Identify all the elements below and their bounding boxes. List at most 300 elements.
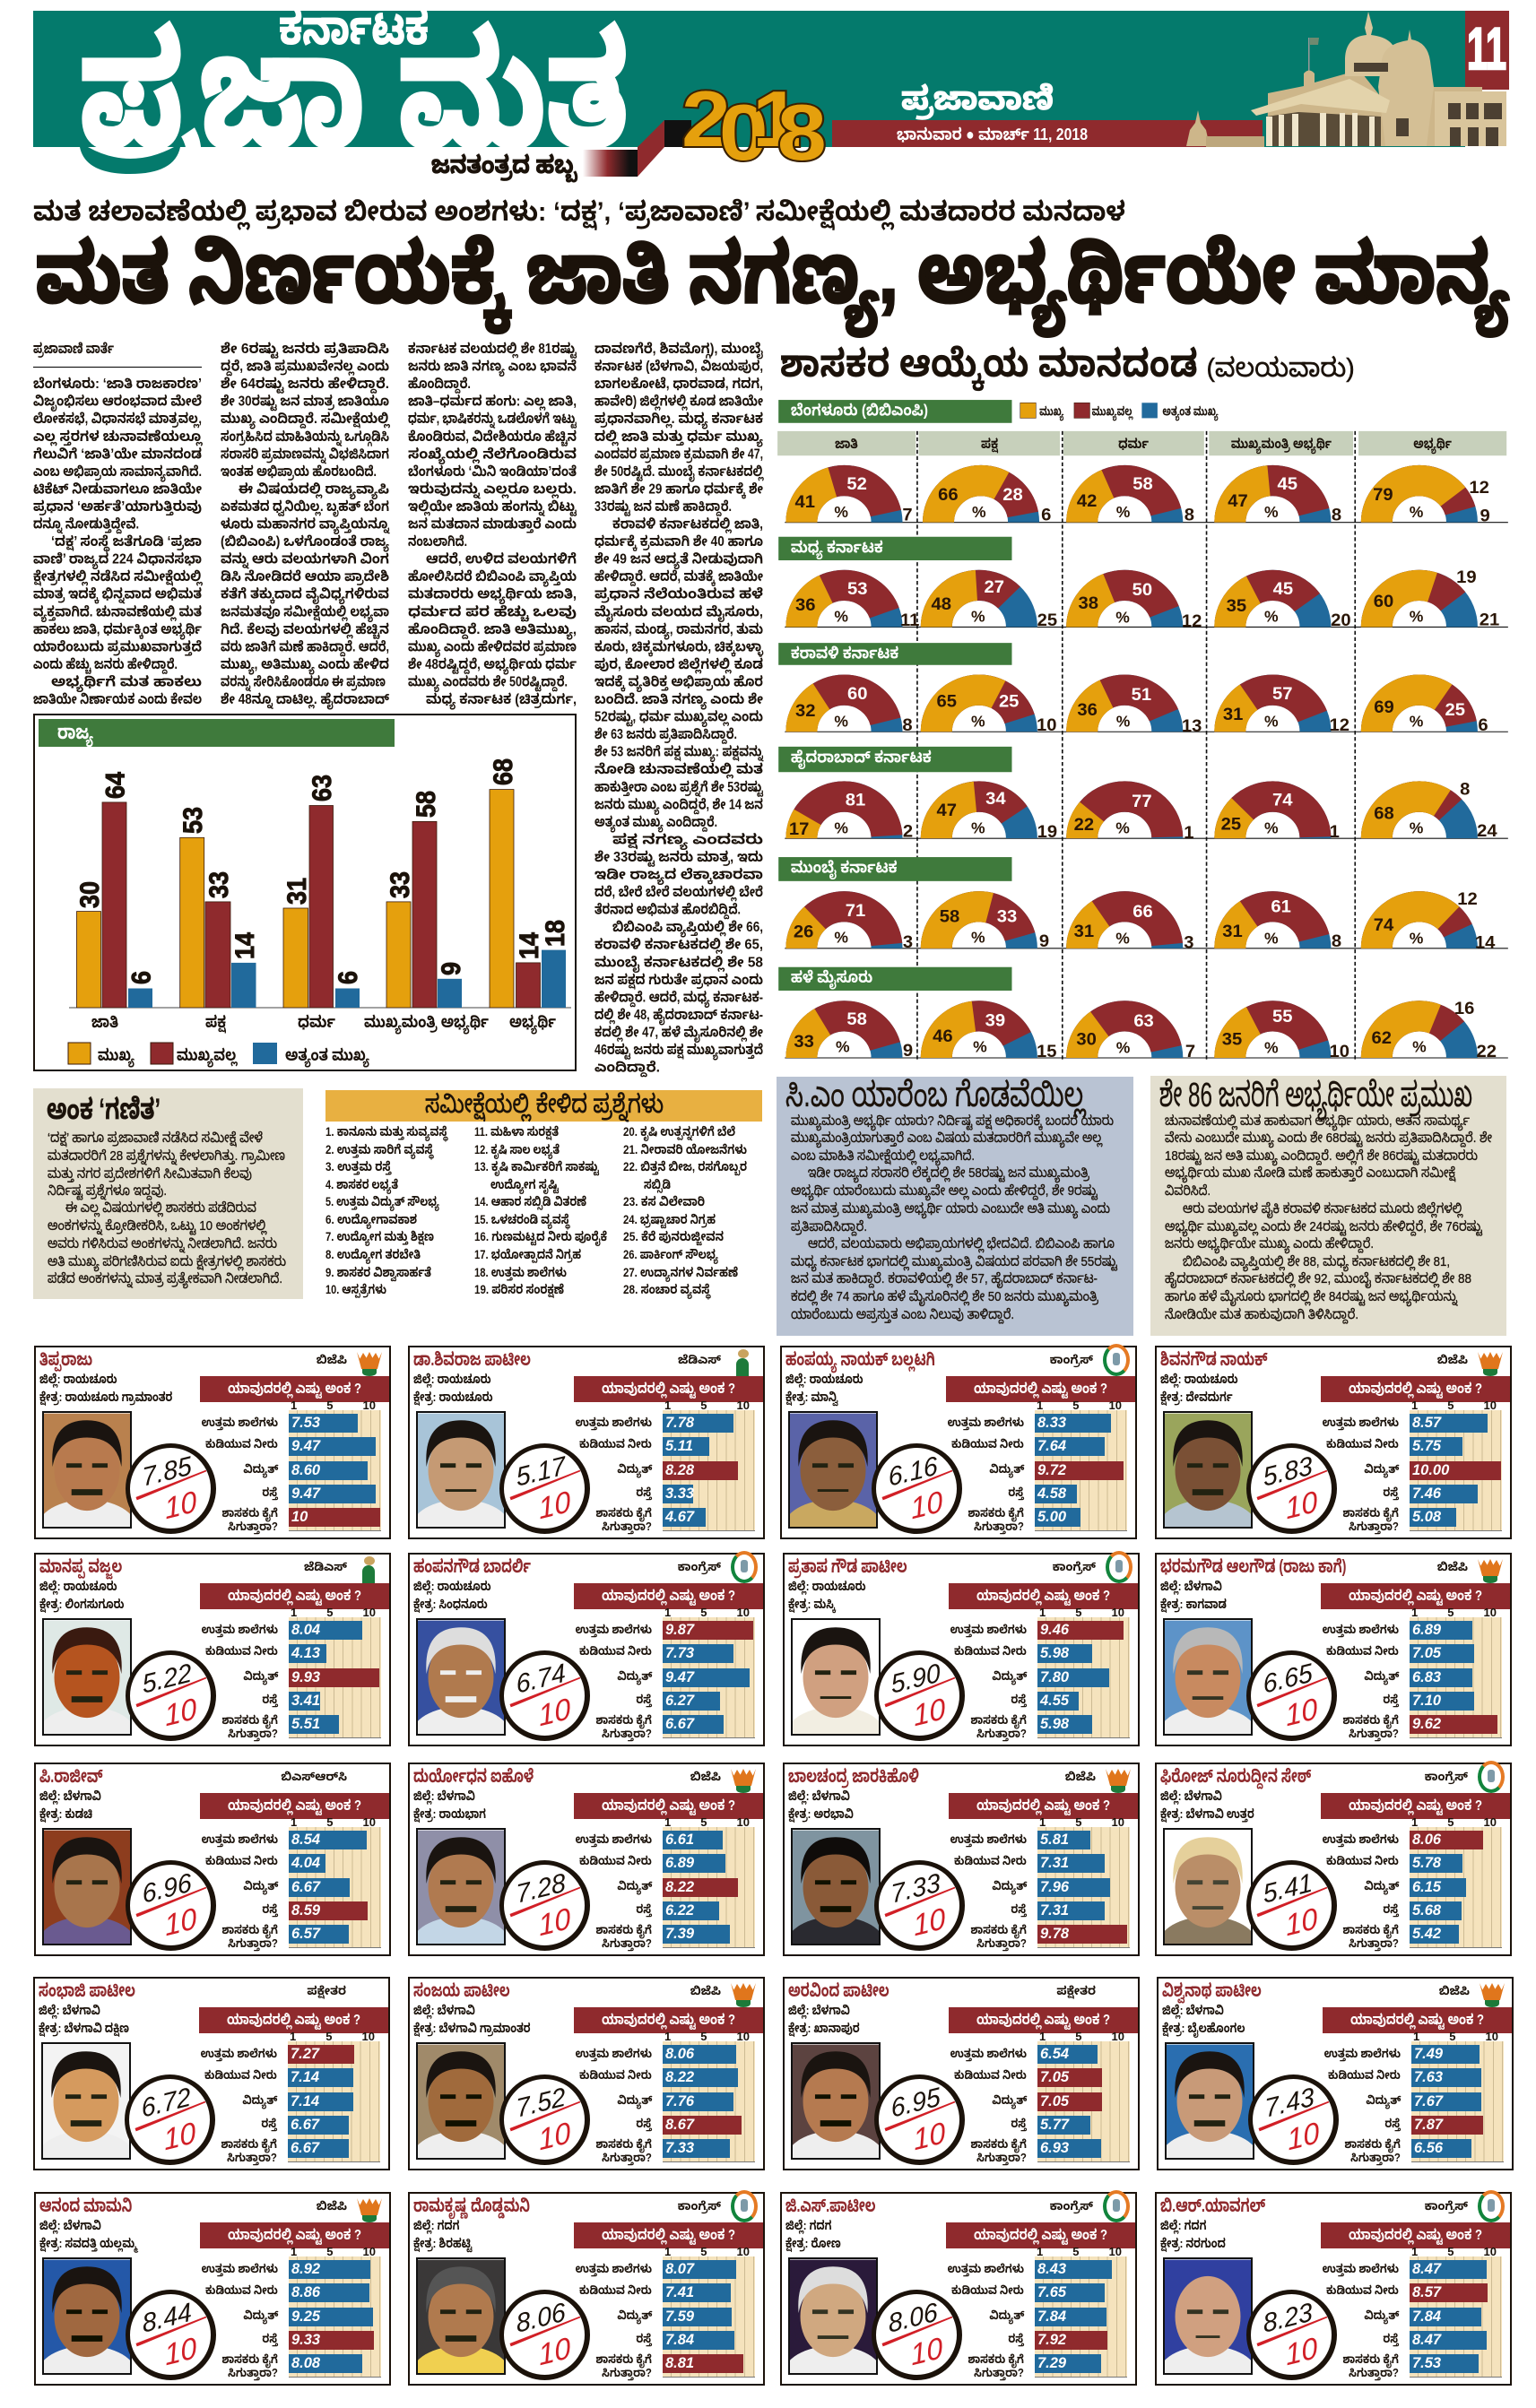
scores chart: ಉತ್ತಮ ಶಾಲೆಗಳು [1324,2047,1401,2060]
article column 3: ಜನರು ಜಾತಿ ನಗಣ್ಯ ಎಂಬ ಭಾವನೆ [408,359,577,377]
gauges: hyderabad karnataka: 77 [1132,792,1152,811]
gauges: old mysuru: % [1116,1039,1130,1057]
gauges: mumbai karnataka: 74 [1374,915,1394,935]
gauges: central karnataka: 48 [931,594,951,614]
scores chart: ರಸ್ತೆ [263,1486,278,1499]
bars: cm candidate [386,821,462,1008]
gauges: old mysuru: % [1412,1038,1427,1056]
scores chart: ಕುಡಿಯುವ ನೀರು [1326,1437,1399,1451]
section title suffix: (ವಲಯವಾರು) [1207,354,1355,383]
candidate card 5 [34,1553,391,1746]
scores chart: ರಸ್ತೆ [1385,2117,1401,2130]
scores chart: 7.27 [291,2046,319,2062]
gauges: hyderabad karnataka: 17 [789,819,809,839]
article column 1: ಯಾರೆಂಬುದು ಪ್ರಮುಖವಾಗುತ್ತದೆ [33,639,202,656]
article column 3: ಮುಖ್ಯ ಎಂದು ಹೇಳಿದವರ ಪ್ರಮಾಣ [408,639,577,657]
bar value labels: 33 [386,871,415,898]
gauges: old mysuru: 22 [1477,1042,1497,1061]
gauges: coastal karnataka: % [1264,713,1279,730]
article column 4: ಬಿಬಿಎಂಪಿ ವ್ಯಾಪ್ತಿಯಲ್ಲಿ ಶೇ 66, [612,920,763,938]
gauges: central karnataka: 21 [1480,610,1499,629]
panel: chief minister candidate: ಎಂಬ ಮಾಹಿತಿ ಸಮೀಕ್ಷೆಯಲ್ಲಿ ಲಭ್ಯವಾಗಿದೆ. [791,1148,975,1166]
article column 3: ಬೆಂಗಳೂರು ‘ಮಿನಿ ಇಂಡಿಯಾ’ದಂತೆ [408,464,577,480]
party: ಕಾಂಗ್ರೆಸ್ [1053,1560,1096,1573]
scores chart: 5 [700,1606,707,1619]
gauges: old mysuru: % [973,1038,987,1056]
scores chart: 10 [1112,1606,1124,1619]
party: ಬಿಜೆಪಿ [1437,1560,1468,1573]
category labels: ಪಕ್ಷ [205,1013,226,1034]
gauges: bengaluru: 42 [1077,491,1097,511]
article column 1: ಕ್ಷೇತ್ರಗಳಲ್ಲಿ ನಡೆಸಿದ ಸಮೀಕ್ಷೆಯಲ್ಲಿ [33,569,203,586]
name [1162,1981,1323,2037]
article column 1: ಎಂದು ಹೆಚ್ಚು ಜನರು ಹೇಳಿದ್ದಾರೆ. [33,657,178,674]
name: ಕ್ಷೇತ್ರ: ಖಾನಾಪುರ [788,2021,860,2035]
scores chart: ರಸ್ತೆ [637,1902,652,1916]
article column 1: ವಿಜೃಂಭಿಸಲು ಆರಂಭವಾದ ಮೇಲೆ [33,394,202,412]
name: ಕ್ಷೇತ್ರ: ರಾಯಚೂರು [413,1390,493,1404]
scores chart: 10 [1486,2030,1498,2043]
gauges: coastal karnataka: % [1116,713,1130,730]
name: ಜಿಲ್ಲೆ: ಗದಗ [413,2218,459,2232]
scores chart [203,2246,387,2380]
gauges: mumbai karnataka: % [834,929,848,946]
candidate card 16 [1157,1977,1514,2170]
scores chart: 7.14 [291,2069,319,2085]
gauges: coastal karnataka [795,684,1488,774]
icon: jds [357,1558,382,1583]
scores chart: ಸಿಗುತ್ತಾರಾ? [1349,1727,1399,1740]
scores chart: 7.67 [1414,2093,1443,2109]
gauges: coastal karnataka: 10 [1037,715,1057,735]
gauges: hyderabad karnataka: 22 [1074,815,1094,835]
heading [1321,2222,1510,2248]
article column 2: ಮುಖ್ಯ, ಅತಿಮುಖ್ಯ ಎಂದು ಹೇಳಿದ [221,657,389,675]
name: ಕ್ಷೇತ್ರ: ಲಿಂಗಸುಗೂರು [39,1597,124,1611]
bar value labels: 53 [178,807,208,834]
chart legend: ಅತ್ಯಂತ ಮುಖ್ಯ [285,1046,369,1068]
scores chart: 7.10 [1412,1693,1441,1709]
name: ಪ್ರತಾಪ ಗೌಡ ಪಾಟೀಲ [788,1557,907,1577]
score: 8.06 [887,2298,939,2339]
scores chart: 1 [1039,1815,1046,1829]
article column 1: ಗೆಲುವಿಗೆ ‘ಜಾತಿ’ಯೇ ಮಾನದಂಡ [33,446,202,462]
gauges: bengaluru: 7 [902,506,913,524]
scores chart: ಕುಡಿಯುವ ನೀರು [205,2283,278,2297]
question list 1-10 [325,1124,448,1298]
party: ಪಕ್ಷೇತರ [307,1984,346,1997]
bar value labels: 6 [127,971,156,984]
scores chart: 9.93 [291,1669,320,1685]
scores chart: ವಿದ್ಯುತ್ [243,1879,278,1893]
scores chart: 9.46 [1040,1622,1069,1638]
gauges: mumbai karnataka: % [1115,930,1130,947]
scores chart: ಉತ್ತಮ ಶಾಲೆಗಳು [576,2047,652,2060]
bar value labels: 14 [515,932,544,959]
article column 1: ಪ್ರಧಾನ ‘ಅರ್ಹತೆ’ಯಾಗುತ್ತಿರುವು [33,499,202,516]
scores chart: ಸಿಗುತ್ತಾರಾ? [602,1936,652,1950]
chart legend: ಮುಖ್ಯ [98,1046,135,1068]
scores chart: 7.14 [291,2093,319,2109]
scores chart [576,1399,755,1535]
icon: jds [731,1351,756,1376]
scores chart: ಕುಡಿಯುವ ನೀರು [951,1437,1024,1451]
scores chart [1323,1816,1508,1951]
scores chart: ಸಿಗುತ್ತಾರಾ? [1349,2366,1399,2379]
scores chart: ಸಿಗುತ್ತಾರಾ? [228,1936,278,1950]
region labels: ಮಧ್ಯ ಕರ್ನಾಟಕ [791,539,883,559]
bars: caste [77,802,152,1008]
heading [574,2222,763,2248]
name: ಸಂಜಯ ಪಾಟೀಲ [413,1981,510,2001]
name: ರಾಮಕೃಷ್ಣ ದೊಡ್ಡಮನಿ [413,2196,530,2216]
article column 3: ಕರ್ನಾಟಕ ವಲಯದಲ್ಲಿ ಶೇ 81ರಷ್ಟು [408,342,577,359]
scores chart: ಕುಡಿಯುವ ನೀರು [205,1854,278,1867]
article column 4 [594,342,764,1078]
score: 7.43 [1263,2083,1315,2124]
scores chart: 10.00 [1412,1462,1449,1478]
article column 3: ಆದರೆ, ಉಳಿದ ವಲಯಗಳಿಗೆ [426,552,577,567]
score: 6.95 [889,2083,942,2124]
name: ಕ್ಷೇತ್ರ: ನರಗುಂದ [1160,2236,1226,2250]
score [126,1860,216,1951]
scores chart: ವಿದ್ಯುತ್ [243,1669,278,1683]
heading: ಯಾವುದರಲ್ಲಿ ಎಷ್ಟು ಅಂಕ ? [602,1382,735,1397]
scores chart: ವಿದ್ಯುತ್ [617,1879,652,1893]
scores chart: ಶಾಸಕರು ಕೈಗೆ [968,2352,1024,2366]
score: 10 [1284,1901,1319,1943]
scores chart: ಸಿಗುತ್ತಾರಾ? [602,1520,652,1533]
score [126,1650,216,1741]
score: 10 [1284,1484,1319,1526]
heading [574,1793,763,1819]
bar value labels: 9 [437,962,466,975]
scores chart: ಕುಡಿಯುವ ನೀರು [579,1854,652,1867]
name [785,2196,947,2252]
scores chart: ಉತ್ತಮ ಶಾಲೆಗಳು [202,1623,278,1636]
scores chart: 5 [1447,2245,1454,2258]
name: ಕ್ಷೇತ್ರ: ಕುಡಚಿ [39,1806,92,1821]
scores chart: 5 [326,1815,334,1829]
scores chart: ರಸ್ತೆ [262,2117,277,2130]
scores chart: ಶಾಸಕರು ಕೈಗೆ [596,1506,652,1520]
gauges: central karnataka: % [834,608,848,626]
heading [1321,1376,1510,1402]
masthead banner [33,3,1509,201]
gauges: bengaluru: 58 [1132,474,1153,494]
scores chart: 10 [1484,1399,1497,1412]
article column 1: ಹಾಕಲು ಜಾತಿ, ಧರ್ಮಕ್ಕಿಂತ ಅಭ್ಯರ್ಥಿ [33,622,202,640]
scores chart: 1 [1037,1399,1043,1412]
gauges: mumbai karnataka: 61 [1271,897,1291,917]
gauges: old mysuru: % [1264,1039,1279,1057]
scores chart: 6.83 [1412,1669,1441,1685]
gauges: coastal karnataka: % [1410,713,1423,730]
scores chart: 6.61 [665,1832,694,1848]
bars: religion [283,805,360,1008]
name: ವಿಶ್ವನಾಥ ಪಾಟೀಲ [1162,1981,1262,2001]
gauges: bengaluru: 28 [1002,485,1023,505]
gauges: central karnataka: 38 [1079,593,1098,613]
heading [200,1793,389,1819]
scores chart: 10 [1484,1815,1497,1829]
score [1246,1860,1337,1951]
article column 2: ಸಂಗ್ರಹಿಸಿದ ಮಾಹಿತಿಯನ್ನು ಒಗ್ಗೂಡಿಸಿ [221,429,389,446]
scores chart: ಉತ್ತಮ ಶಾಲೆಗಳು [1323,1416,1399,1429]
date: ಭಾನುವಾರ ● ಮಾರ್ಚ್ 11, 2018 [897,126,1088,143]
article column 2: ಜನಮತವೂ ಸಮೀಕ್ಷೆಯಲ್ಲಿ ಲಭ್ಯವಾ [221,604,389,622]
gauges: hyderabad karnataka: % [834,819,848,836]
name: ಕ್ಷೇತ್ರ: ಅರಭಾವಿ [788,1806,854,1821]
question list 11-19: 19. ಪರಿಸರ ಸಂರಕ್ಷಣೆ [474,1282,564,1299]
score: 7.85 [141,1451,193,1493]
gauge legend: ಅತ್ಯಂತ ಮುಖ್ಯ [1162,404,1219,421]
name: ಆನಂದ ಮಾಮನಿ [39,2196,132,2216]
scores chart: ಸಿಗುತ್ತಾರಾ? [602,1727,652,1740]
heading: ಯಾವುದರಲ್ಲಿ ಎಷ್ಟು ಅಂಕ ? [976,1798,1110,1814]
scores chart: 1 [1411,1399,1418,1412]
candidate card 12 [1155,1763,1512,1956]
scores chart: ಸಿಗುತ್ತಾರಾ? [974,2366,1024,2379]
region labels [778,400,1011,991]
scores chart: 7.41 [665,2284,694,2300]
scores chart: ಸಿಗುತ್ತಾರಾ? [227,2151,277,2164]
category labels: ಮುಖ್ಯಮಂತ್ರಿ ಅಭ್ಯರ್ಥಿ [364,1013,489,1035]
scores chart: ಶಾಸಕರು ಕೈಗೆ [1343,1713,1399,1727]
scores chart: 4.13 [291,1645,320,1661]
chart legend [68,1043,369,1068]
scores chart: ಕುಡಿಯುವ ನೀರು [954,1644,1027,1658]
score: 10 [1284,2330,1319,2372]
scores chart: 4.55 [1040,1693,1069,1709]
scores chart: ವಿದ್ಯುತ್ [617,1669,652,1683]
score: 5.90 [889,1659,942,1700]
question list 1-10: 2. ಉತ್ತಮ ಸಾರಿಗೆ ವ್ಯವಸ್ಥೆ [325,1142,434,1160]
score: 10 [909,1484,944,1526]
scores chart: ಸಿಗುತ್ತಾರಾ? [1349,1520,1399,1533]
name: ಕ್ಷೇತ್ರ: ರಾಯಭಾಗ [413,1806,486,1821]
scores chart: 8.81 [665,2355,694,2371]
scores chart: 8.08 [291,2355,320,2371]
name [39,1557,124,1614]
article column 4: ದಾವಣಗೆರೆ, ಶಿವಮೊಗ್ಗ), ಮುಂಬೈ [594,342,763,359]
heading: ಯಾವುದರಲ್ಲಿ ಎಷ್ಟು ಅಂಕ ? [602,2013,735,2028]
article column 1: ದನ್ನೂ ನೋಡುತ್ತಿದ್ದೇವೆ. [33,516,139,534]
gauges: bengaluru: % [1410,503,1423,521]
category labels [91,1013,556,1035]
heading: ಅಂಕ ‘ಗಣಿತ’ [47,1093,161,1125]
scores chart: 6.27 [665,1693,694,1709]
panel: candidate matters: ಅಭ್ಯರ್ಥಿ ಮುಖ್ಯವಲ್ಲ ಎಂದು ಶೇ 24ರಷ್ಟು ಜನರು ಹೇಳಿದ್ದರೆ, ಶೇ 76ರಷ್ಟು [1165,1219,1483,1237]
name: ಜಿಲ್ಲೆ: ಬೆಳಗಾವಿ [39,2003,100,2017]
heading: ಸಮೀಕ್ಷೆಯಲ್ಲಿ ಕೇಳಿದ ಪ್ರಶ್ನೆಗಳು [425,1090,664,1122]
scores chart: ಉತ್ತಮ ಶಾಲೆಗಳು [201,2047,277,2060]
question list 11-19: ಉದ್ಯೋಗ ಸೃಷ್ಟಿ [490,1177,560,1195]
name: ಕ್ಷೇತ್ರ: ಕಾಗವಾಡ [1160,1597,1227,1611]
question list 1-10: 1. ಕಾನೂನು ಮತ್ತು ಸುವ್ಯವಸ್ಥೆ [325,1124,448,1142]
photo [416,1411,506,1529]
gauges: old mysuru: 16 [1454,999,1474,1018]
article column 3: ಮತದಾರರು ಅಭ್ಯರ್ಥಿಯ ಜಾತಿ, [408,587,577,605]
scores chart: ಶಾಸಕರು ಕೈಗೆ [222,1506,278,1520]
gauges: hyderabad karnataka: 34 [985,789,1007,809]
gauges: old mysuru: 55 [1272,1007,1293,1026]
gauges: old mysuru: 33 [794,1032,814,1052]
scores chart: ರಸ್ತೆ [1384,1486,1399,1499]
scores chart: ವಿದ್ಯುತ್ [989,2308,1024,2322]
heading: ಸಿ.ಎಂ ಯಾರೆಂಬ ಗೊಡವೆಯಿಲ್ಲ [785,1077,1087,1119]
scores chart: 3.33 [665,1486,694,1502]
scores chart: 5.00 [1037,1509,1066,1525]
panel: candidate matters: ವಿವರಿಸಿದೆ. [1165,1183,1211,1199]
gauges: bengaluru: % [1264,503,1279,521]
category labels: ಧರ್ಮ [298,1013,335,1031]
scores chart: ಶಾಸಕರು ಕೈಗೆ [222,1923,278,1936]
scores chart: 10 [1484,1606,1497,1619]
scores chart: 7.84 [1412,2308,1441,2325]
category labels: ಜಾತಿ [91,1013,118,1031]
name [413,1557,531,1614]
gauges: hyderabad karnataka: % [971,819,985,836]
scores chart: 9.87 [665,1622,694,1638]
scores chart: ವಿದ್ಯುತ್ [617,1462,652,1476]
gauge column headers: ಅಭ್ಯರ್ಥಿ [1413,437,1452,455]
heading: ಯಾವುದರಲ್ಲಿ ಎಷ್ಟು ಅಂಕ ? [974,1382,1107,1397]
scores chart [577,2031,761,2165]
heading [946,2222,1135,2248]
article column 3: ಮಧ್ಯ ಕರ್ನಾಟಕ (ಚಿತ್ರದುರ್ಗ, [426,692,577,710]
score [499,1860,590,1951]
panel: score explanation: ನಿರ್ದಿಷ್ಟ ಪ್ರಶ್ನೆಗಳೂ ಇದ್ದವು. [48,1183,167,1200]
gauges: bengaluru: 47 [1228,491,1248,511]
scores chart: ಸಿಗುತ್ತಾರಾ? [228,2366,278,2379]
candidate card 18 [408,2192,765,2386]
article column 4: ಕರಾವಳಿ ಕರ್ನಾಟಕದಲ್ಲಿ ಶೇ 65, [594,938,763,955]
article column 4: ಪ್ರಧಾನವಾಗಿಲ್ಲ. ಮಧ್ಯ ಕರ್ನಾಟಕ [594,411,763,429]
score: 8.44 [141,2298,193,2339]
score [499,2075,590,2165]
name: ಜಿಲ್ಲೆ: ಬೆಳಗಾವಿ [1160,1789,1222,1803]
gauges: central karnataka: % [1264,608,1279,626]
bar value labels: 68 [489,758,518,785]
question list 1-10: 6. ಉದ್ಯೋಗಾವಕಾಶ [325,1212,417,1229]
panel: chief minister candidate: ಜನ ಮಾತ್ರ ಮುಖ್ಯಮಂತ್ರಿ ಅಭ್ಯರ್ಥಿ ಯಾರು ಎಂಬುದೇ ಅತಿ ಮುಖ್ಯ ಎಂದು [791,1201,1110,1219]
panel: score explanation: ಅಂಕಗಳನ್ನು ಕ್ರೋಡೀಕರಿಸಿ, ಒಟ್ಟು 10 ಅಂಕಗಳಲ್ಲಿ [48,1218,267,1235]
scores chart: ಸಿಗುತ್ತಾರಾ? [1350,2151,1401,2164]
question list 20-28: 22. ಬಿತ್ತನೆ ಬೀಜ, ರಸಗೊಬ್ಬರ [623,1159,747,1176]
photo [416,2257,506,2375]
candidate card 4 [1155,1346,1512,1539]
scores chart: ಉತ್ತಮ ಶಾಲೆಗಳು [948,2262,1024,2275]
scores chart: ಸಿಗುತ್ತಾರಾ? [976,2151,1027,2164]
gauges: bengaluru: 8 [1332,506,1341,524]
name [413,1981,575,2037]
bar value labels: 63 [308,775,337,801]
scores chart: ರಸ್ತೆ [263,1693,278,1706]
score: 5.17 [515,1451,567,1493]
scores chart: 5 [1072,2245,1080,2258]
question list 20-28: 26. ಪಾರ್ಕಿಂಗ್ ಸೌಲಭ್ಯ [623,1247,718,1264]
candidate card 17 [34,2192,391,2386]
gauges: central karnataka: 35 [1227,596,1246,616]
scores chart: ರಸ್ತೆ [637,1486,652,1499]
icon: lotus [731,1768,756,1793]
score: 6.72 [140,2083,192,2124]
scores chart: 6.15 [1412,1879,1441,1895]
scores chart [1323,1607,1508,1741]
score: 6.16 [887,1451,939,1493]
gauges: hyderabad karnataka: % [1115,819,1130,836]
scores chart: 1 [291,1399,297,1412]
heading: ಯಾವುದರಲ್ಲಿ ಎಷ್ಟು ಅಂಕ ? [228,1798,361,1814]
icon: lotus [1480,1982,1505,2007]
scores chart: 8.57 [1412,1415,1441,1431]
party: ಬಿಎಸ್‌ಆರ್‌ಸಿ [281,1770,347,1783]
panel: candidate matters: ಹೈದರಾಬಾದ್ ಕರ್ನಾಟಕದಲ್ಲಿ ಶೇ 92, ಮುಂಬೈ ಕರ್ನಾಟಕದಲ್ಲಿ ಶೇ 88 [1165,1271,1471,1289]
scores chart: 1 [664,1606,671,1619]
heading: ಯಾವುದರಲ್ಲಿ ಎಷ್ಟು ಅಂಕ ? [227,2013,360,2028]
article column 1: ಮಾತ್ರ ಇದಕ್ಕೆ ಭಿನ್ನವಾದ ಅಭಿಮತ [33,587,202,604]
scores chart: 5 [1072,1399,1080,1412]
article column 1: ಟಿಕೆಟ್ ನೀಡುವಾಗಲೂ ಜಾತಿಯೇ [33,481,203,497]
scores chart: 5 [700,2030,707,2043]
bars: candidate [490,790,566,1008]
scores chart: 10 [737,1399,750,1412]
name: ಜಿಲ್ಲೆ: ರಾಯಚೂರು [39,1372,117,1386]
question list 11-19: 15. ಒಳಚರಂಡಿ ವ್ಯವಸ್ಥೆ [474,1212,570,1230]
scores chart: 6.22 [665,1902,694,1919]
scores chart: ಕುಡಿಯುವ ನೀರು [204,2068,277,2082]
article column 3: ಶೇ 48ರಷ್ಟಿದ್ದರೆ, ಅಭ್ಯರ್ಥಿಯ ಧರ್ಮ [408,657,577,675]
article column 4: ಎಂದಿದ್ದಾರೆ. [594,1061,660,1078]
section title: ಶಾಸಕರ ಆಯ್ಕೆಯ ಮಾನದಂಡ [780,342,1198,392]
question list 20-28: ಸಬ್ಸಿಡಿ [644,1177,671,1193]
party: ಬಿಜೆಪಿ [317,1353,347,1366]
panel: candidate matters: ಆರು ವಲಯಗಳ ಪೈಕಿ ಕರಾವಳಿ ಕರ್ನಾಟಕದ ಮೂರು ಜಿಲ್ಲೆಗಳಲ್ಲಿ [1183,1201,1463,1219]
scores chart: 5.98 [1040,1716,1069,1732]
subheading: ಮತ ಚಲಾವಣೆಯಲ್ಲಿ ಪ್ರಭಾವ ಬೀರುವ ಅಂಶಗಳು: ‘ದಕ್ಷ’, ‘ಪ್ರಜಾವಾಣಿ’ ಸಮೀಕ್ಷೆಯಲ್ಲಿ ಮತದಾರರ ಮನದಾಳ [33,197,1125,231]
score [1248,2075,1339,2165]
scores chart [1323,1399,1502,1535]
scores chart: ಶಾಸಕರು ಕೈಗೆ [1343,1923,1399,1936]
candidate card 10 [408,1763,765,1956]
scores chart: 9.25 [291,2308,320,2325]
score: 10 [912,1901,947,1943]
photo [791,2042,881,2160]
name: ಹಂಪನಗೌಡ ಬಾದರ್ಲಿ [413,1557,531,1577]
heading: ಯಾವುದರಲ್ಲಿ ಎಷ್ಟು ಅಂಕ ? [976,2013,1110,2028]
masthead ribbon fold [583,120,691,177]
scores chart: ವಿದ್ಯುತ್ [242,2093,277,2107]
photo [788,1411,878,1529]
name: ಜಿಲ್ಲೆ: ಬೆಳಗಾವಿ [788,1789,850,1803]
article column 2: ಡಿಸಿ ನೋಡಿದರೆ ಆಯಾ ಪ್ರಾದೇಶಿ [221,569,389,585]
panel: candidate matters: ಅಭ್ಯರ್ಥಿಯ ಮುಖ ನೋಡಿ ಮಣೆ ಹಾಕುತ್ತಾರೆ ಎಂಬುದಾಗಿ ಸಮೀಕ್ಷೆ [1165,1165,1455,1183]
scores chart: 1 [290,2030,296,2043]
gauges: old mysuru: 58 [846,1009,867,1029]
score: 10 [909,2330,944,2372]
question list 20-28 [623,1124,747,1300]
name: ಜಿಲ್ಲೆ: ಬೆಳಗಾವಿ [39,1789,101,1803]
article column 3: ನಂಬಲಾಗಿದೆ. [408,534,467,550]
gauges: central karnataka: 12 [1182,611,1202,631]
scores chart: 8.33 [1037,1415,1066,1431]
score [872,1443,962,1534]
scores chart: ವಿದ್ಯುತ್ [243,2308,278,2322]
bar value labels: 30 [75,881,105,908]
party: ಜೆಡಿಎಸ್ [678,1353,721,1366]
bar value labels: 18 [541,920,570,947]
